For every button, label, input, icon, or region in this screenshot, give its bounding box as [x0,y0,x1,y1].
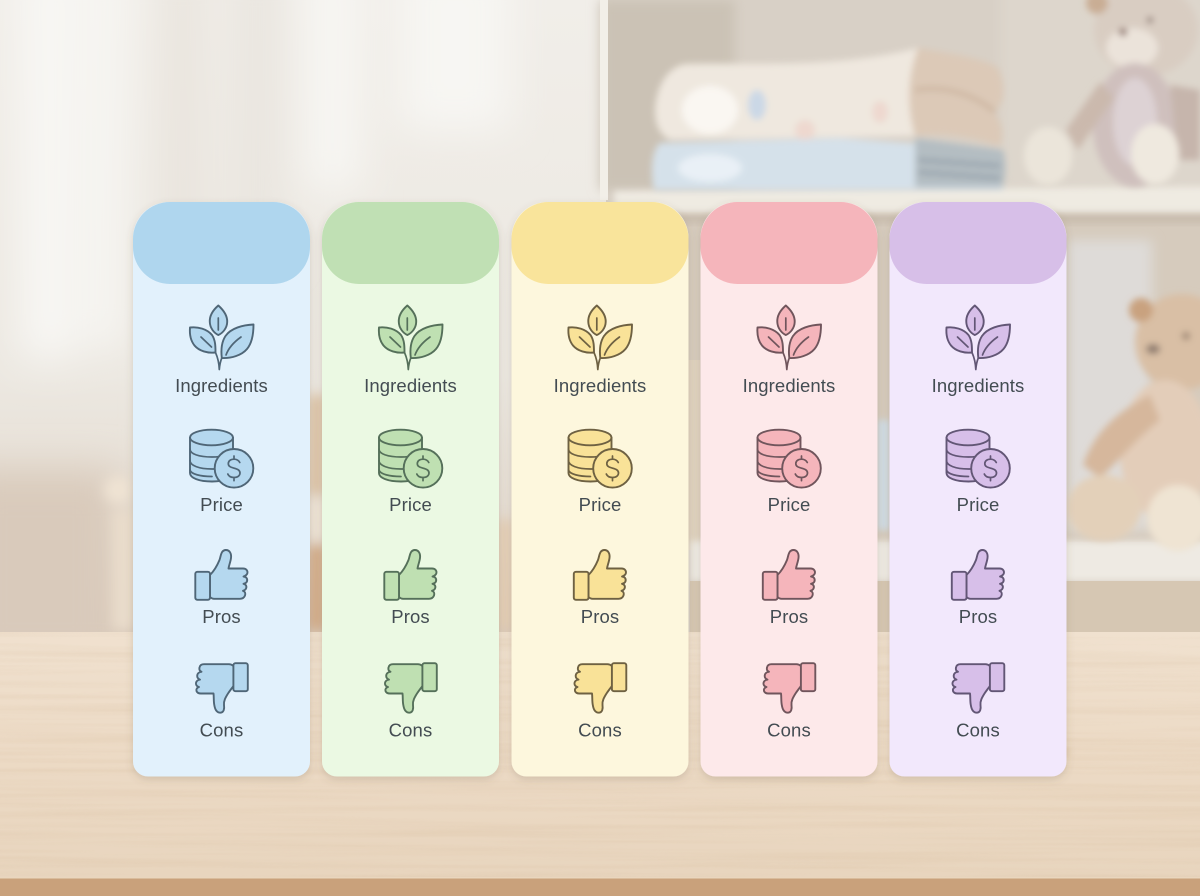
panel: yellow column [512,202,688,776]
header [133,202,310,284]
background: lower shelf [690,541,1200,581]
icon: thumbs up [384,550,436,600]
background: wooden table [0,632,1200,878]
icon: leaves [190,306,254,370]
icon: thumbs down [763,663,815,713]
panel: green column [322,202,499,776]
icon: thumbs down [574,663,626,713]
icon: thumbs up [195,550,247,600]
panel body [133,202,310,776]
icon: leaves [757,306,821,370]
background: upper shelf [614,186,1200,212]
label: price: Price [389,494,432,515]
header [322,202,499,284]
label: ingredients: Ingredients [364,375,457,396]
panel: pink column [700,202,878,776]
label: ingredients: Ingredients [743,375,835,396]
background: curtain light [0,0,510,670]
background: toys behind cards [104,395,513,630]
label: ingredients: Ingredients [932,375,1024,396]
icon: thumbs down [952,663,1004,713]
panel body [890,202,1066,776]
icon: leaves [379,306,442,370]
label: pros: Pros [202,606,241,627]
background: shelving wall [606,0,1200,640]
icon: leaves [946,306,1010,370]
panel: blue column [133,202,310,776]
label: cons: Cons [956,720,1000,740]
icon: coins [568,430,632,488]
label: cons: Cons [578,720,622,740]
label: pros: Pros [959,606,997,627]
label: price: Price [768,494,810,515]
label: ingredients: Ingredients [175,375,268,396]
panel body [700,202,878,776]
icon: coins [190,430,253,488]
label: price: Price [579,494,621,515]
panel body [512,202,688,776]
label: cons: Cons [389,720,432,740]
header [890,202,1066,284]
label: cons: Cons [767,720,811,740]
panel body [322,202,499,776]
icon: thumbs up [952,550,1004,600]
icon: thumbs down [385,663,437,713]
background: bear on upper shelf [1024,0,1200,187]
background: bear on lower shelf [1067,294,1200,551]
header [700,202,878,284]
label: pros: Pros [391,606,430,627]
background: blankets [652,48,1005,190]
label: pros: Pros [581,606,619,627]
label: pros: Pros [770,606,808,627]
label: price: Price [957,494,999,515]
header [512,202,688,284]
background: table edge [0,877,1200,896]
icon: thumbs up [763,550,815,600]
icon: leaves [568,306,632,370]
icon: coins [946,430,1010,488]
label: cons: Cons [200,720,243,740]
icon: thumbs up [574,550,626,600]
icon: thumbs down [196,663,248,713]
panel: purple column [890,202,1066,776]
icon: coins [379,430,442,488]
label: ingredients: Ingredients [554,375,646,396]
label: price: Price [200,494,243,515]
icon: coins [758,430,821,488]
